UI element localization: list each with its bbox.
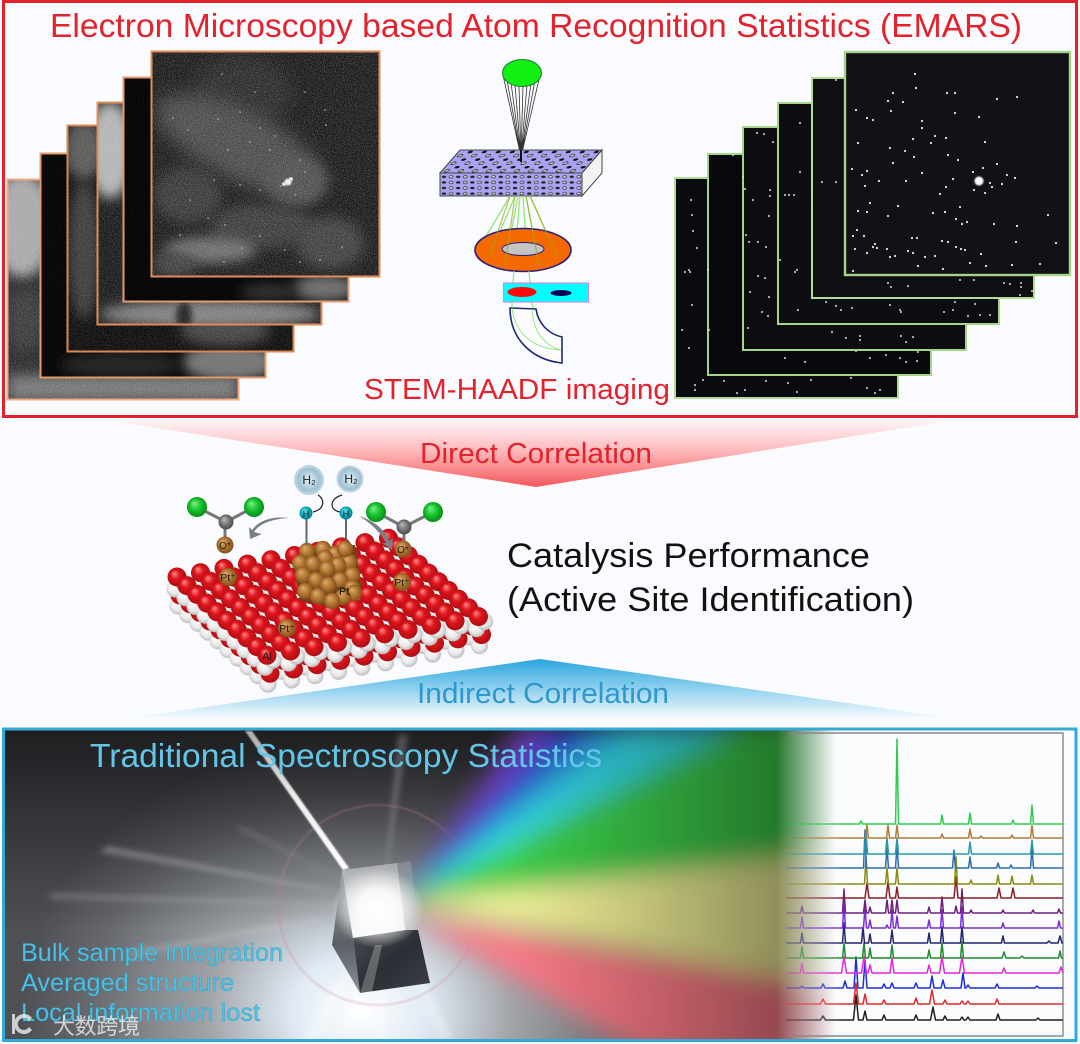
spectra chart xyxy=(786,733,1063,1036)
Pt cluster xyxy=(292,541,362,609)
H2 molecules xyxy=(294,466,364,512)
panel: EMARS xyxy=(0,2,1076,416)
single Pt sites: Pt⁺ xyxy=(220,572,236,584)
rainbow xyxy=(405,730,831,1039)
frame 5 xyxy=(124,78,357,302)
left molecule xyxy=(187,497,264,554)
panel notes: Averaged structure xyxy=(21,969,234,997)
spillover arrow left xyxy=(249,518,289,539)
prism photo background xyxy=(4,728,880,1044)
beam impact point xyxy=(520,150,522,162)
spectra lines xyxy=(786,739,1063,1020)
spectrum window xyxy=(504,283,588,302)
incident beam xyxy=(245,731,349,870)
frame 2 xyxy=(40,154,278,382)
image stack: raw STEM frames xyxy=(0,52,380,401)
arrow: indirect correlation: Indirect Correlation xyxy=(417,678,669,710)
watermark xyxy=(12,1014,140,1039)
H atoms on cluster: H xyxy=(343,509,349,519)
frame 4 xyxy=(86,102,322,330)
panel notes: Local information lost xyxy=(21,999,260,1027)
image stack: recognised atoms xyxy=(675,52,1070,398)
panel: traditional spectroscopy xyxy=(4,728,1076,1044)
watermark: 大数跨境 xyxy=(53,1014,140,1039)
light rays xyxy=(50,735,455,1040)
electron beam xyxy=(503,75,540,157)
left molecule: O* xyxy=(219,541,231,552)
atom frame 2 xyxy=(708,154,931,375)
catalysis text: Catalysis Performance xyxy=(507,537,870,575)
lens ring xyxy=(278,805,478,1005)
single Pt sites: Al xyxy=(262,651,272,663)
arrow: indirect correlation xyxy=(128,659,952,718)
transmitted rays xyxy=(512,271,533,312)
right molecule: O* xyxy=(397,545,409,556)
arrow: direct correlation: Direct Correlation xyxy=(420,438,652,470)
panel notes: Bulk sample integration xyxy=(21,939,283,967)
chart axes xyxy=(790,733,1063,1036)
catalyst illustration xyxy=(166,466,493,693)
annular detector xyxy=(475,196,571,272)
beam falloff xyxy=(522,730,832,1039)
STEM-HAADF schematic xyxy=(440,60,602,363)
prism glow xyxy=(335,871,422,946)
H atoms on cluster xyxy=(300,506,352,545)
white fade xyxy=(776,730,1076,1040)
frame 3 xyxy=(64,120,294,352)
atom frame 4 xyxy=(778,103,999,324)
atom frame 5 xyxy=(812,78,1034,298)
single Pt sites: Pt⁺ xyxy=(279,623,295,635)
atom frame 6 xyxy=(845,52,1070,275)
H2 molecules: H₂ xyxy=(302,473,316,487)
frame 1 xyxy=(0,173,238,401)
Pt cluster: Pt xyxy=(339,586,349,598)
imaging caption: STEM-HAADF imaging xyxy=(364,374,670,406)
prism xyxy=(332,861,430,993)
specimen slab xyxy=(440,150,602,196)
panel heading: Traditional Spectroscopy Statistics xyxy=(90,737,602,774)
magnetic prism xyxy=(510,308,562,363)
panel notes xyxy=(21,939,283,1027)
spillover arrow right xyxy=(359,516,393,550)
panel frame xyxy=(4,2,1076,416)
title: Electron Microscopy based Atom Recognition Statistics (EMARS) xyxy=(50,7,1022,44)
atom frame 3 xyxy=(743,127,966,350)
atom frame 1 xyxy=(675,178,898,398)
H atoms on cluster: H xyxy=(303,509,309,519)
catalysis text: (Active Site Identification) xyxy=(507,581,914,619)
right molecule xyxy=(366,502,443,558)
arrow: direct correlation xyxy=(112,421,948,487)
detector scatter rays xyxy=(482,196,557,265)
H2 molecules: H₂ xyxy=(344,472,358,486)
support lattice xyxy=(166,529,493,693)
electron source xyxy=(502,60,542,86)
panel frame xyxy=(4,729,1076,1040)
single Pt sites xyxy=(219,568,411,663)
single Pt sites: Pt⁺ xyxy=(394,577,410,589)
frame 6 xyxy=(142,52,380,276)
catalysis text xyxy=(507,537,914,619)
